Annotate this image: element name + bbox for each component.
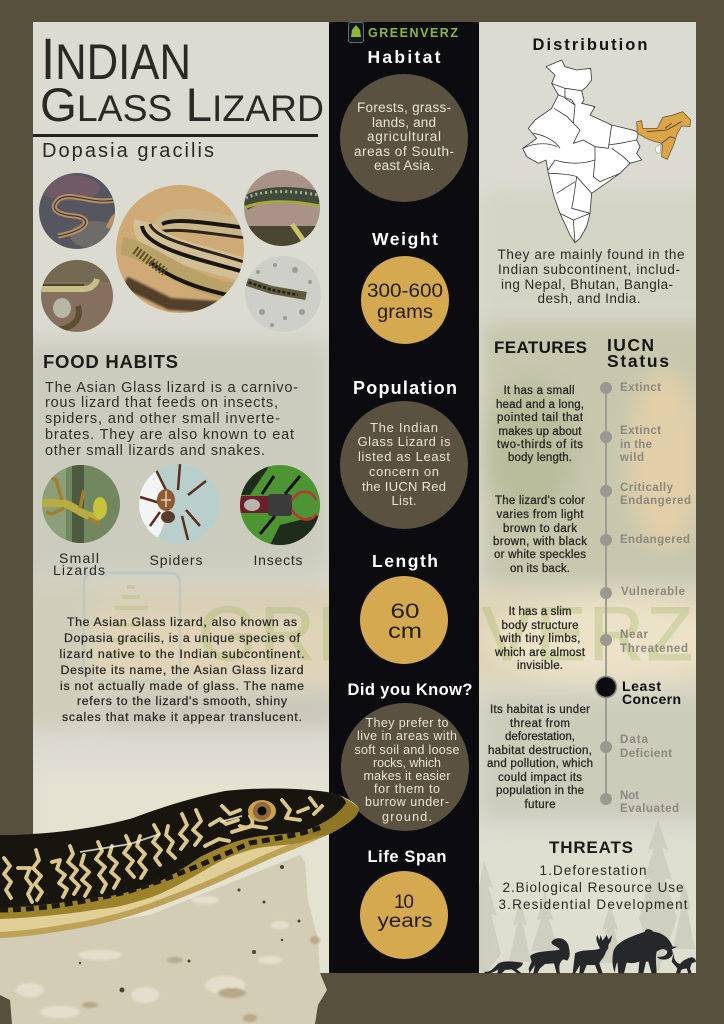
title: [40, 27, 324, 131]
lizard glossy highlight: [80, 816, 242, 852]
lizard skin pattern: [4, 798, 322, 902]
food labels: Insects: [254, 552, 302, 568]
lizard belly shadow: [0, 832, 327, 935]
photo: lizard on branch: [244, 170, 322, 248]
subtitle: scientific name: Dopasia gracilis: [42, 140, 214, 162]
stat: length: cm: [388, 620, 422, 643]
text block: threats list: [498, 863, 688, 912]
text block: feature head and tail: makes up about: [498, 426, 582, 438]
text block: species description: The Asian Glass lizard, also known as: [67, 615, 297, 629]
food labels: Spiders: [150, 552, 202, 568]
stat: habitat: lands, and: [372, 115, 436, 130]
text block: feature head and tail: It has a small: [504, 385, 574, 397]
text block: feature colour: [493, 495, 587, 575]
stat: weight: Weight: [372, 229, 438, 249]
heading: iucn status: IUCN: [607, 335, 654, 355]
text block: threats list: 3.Residential Development: [498, 897, 688, 912]
map: india with northeast highlighted: [523, 60, 691, 243]
text block: feature head and tail: pointed tail that: [497, 412, 584, 424]
food labels: Lizards: [53, 562, 105, 578]
callout: did you know: rocks, which: [373, 756, 441, 770]
text block: distribution: desh, and India.: [538, 291, 640, 306]
stat: life span: years: [378, 911, 432, 932]
text block: feature threat: future: [524, 799, 556, 811]
icon: leopard: [485, 961, 523, 973]
text block: feature threat: deforestation,: [505, 731, 575, 743]
text block: feature body: which are almost: [494, 647, 586, 659]
stat: population: The Indian: [370, 420, 438, 435]
text block: food habits: brates. They are also known to eat: [45, 427, 294, 443]
text block: species description: Despite its name, the Asian Glass lizard: [60, 663, 304, 677]
title: INDIAN: [41, 27, 191, 92]
icon: spider photo: [139, 464, 219, 544]
watermark: greenverz logo: GREENVERZ: [198, 592, 693, 677]
map: northeast region: [637, 112, 691, 159]
text block: species description: lizard native to the Indian subcontinent.: [60, 647, 304, 661]
text block: feature colour: brown, with black: [493, 536, 587, 548]
callout: did you know: soft soil and loose: [354, 743, 460, 757]
status labels: Vulnerable: [621, 586, 685, 598]
text block: distribution: Indian subcontinent, includ-: [498, 262, 680, 277]
status labels: Endangered: [620, 534, 690, 546]
text block: distribution: [498, 247, 684, 306]
text block: species description: [60, 615, 304, 724]
stat: population: [340, 378, 468, 529]
text block: feature head and tail: body length.: [508, 452, 572, 464]
stat: length: [360, 551, 448, 664]
lizard dark back: [0, 788, 346, 908]
stat: weight: [361, 229, 449, 344]
callout: did you know: Did you Know?: [348, 681, 472, 699]
icon: stag beetle photo: [240, 465, 320, 545]
status labels: Extinct: [620, 382, 661, 394]
map: india mainland: [523, 60, 642, 243]
stat: population: the IUCN Red: [362, 479, 446, 494]
heading: features: FEATURES: [494, 338, 587, 357]
forest trees background: [467, 820, 695, 976]
map: state borders: [523, 83, 637, 243]
text block: feature colour: brown to dark: [503, 523, 577, 535]
callout: did you know: makes it easier: [364, 769, 450, 783]
text block: food habits: other small lizards and snakes.: [45, 443, 265, 459]
lizard eye: [248, 800, 276, 822]
callout: did you know: for them to: [374, 782, 440, 796]
status labels: Near: [620, 629, 649, 641]
stat: habitat: east Asia.: [374, 158, 434, 173]
text block: food habits: The Asian Glass lizard is a carnivo-: [45, 380, 298, 396]
icon: ibex: [529, 938, 570, 973]
text block: feature threat: population in the: [496, 785, 584, 797]
stat: habitat: Forests, grass-: [357, 100, 451, 115]
icon: small lizard photo: [42, 465, 120, 543]
icon: elephant: [612, 929, 677, 973]
text block: food habits: rous lizard that feeds on insects,: [45, 395, 278, 411]
callout: did you know: live in areas with: [357, 729, 457, 743]
heading: iucn status: [607, 335, 669, 371]
text block: threats list: 1.Deforestation: [540, 863, 646, 878]
text block: feature colour: on its back.: [510, 563, 570, 575]
stat: life span: 10: [394, 892, 414, 913]
lizard snout: [305, 791, 359, 835]
logo: greenverz: GREENVERZ: [368, 26, 458, 40]
photo: lizard on dark rock: [39, 173, 120, 249]
photo: lizard close-up on sand: [116, 185, 246, 313]
status labels: [619, 382, 691, 815]
text block: feature colour: The lizard's color: [495, 495, 585, 507]
lizard body base: [0, 788, 359, 938]
text block: threats list: 2.Biological Resource Use: [502, 880, 684, 895]
text block: distribution: They are mainly found in the: [498, 247, 684, 262]
text block: species description: is not actually made of glass. The name: [60, 679, 304, 693]
stat: weight: 300-600: [367, 281, 443, 302]
icon: monkey: [672, 951, 696, 973]
photo: glass lizard head and body: [0, 788, 359, 938]
text block: feature body: [494, 606, 586, 672]
stat: population: List.: [392, 493, 416, 508]
text block: feature threat: Its habitat is under: [490, 704, 590, 716]
text block: feature threat: [487, 704, 593, 811]
status labels: Data: [620, 734, 649, 746]
watermark: greenverz logo: [84, 573, 693, 681]
stat: life span: Life Span: [368, 848, 446, 866]
text block: feature head and tail: [496, 385, 584, 464]
status labels: Deficient: [620, 748, 672, 760]
heading: food habits: FOOD HABITS: [43, 351, 178, 372]
status labels: wild: [619, 452, 644, 464]
active status label: Concern: [622, 691, 681, 707]
title: GLASS LIZARD: [40, 78, 324, 131]
text block: species description: scales that make it appear translucent.: [62, 710, 302, 724]
heading: threats: THREATS: [549, 838, 633, 857]
stat: population: Population: [353, 378, 457, 398]
text block: feature body: It has a slim: [508, 606, 572, 618]
stat: population: Glass Lizard is: [358, 434, 451, 449]
stat: population: concern on: [369, 464, 439, 479]
active status label: [622, 678, 681, 707]
status labels: in the: [620, 439, 652, 451]
callout: did you know: They prefer to: [366, 716, 449, 730]
stat: length: 60: [390, 600, 420, 623]
heading: iucn status: Status: [607, 351, 669, 371]
text block: species description: Dopasia gracilis, is a unique species of: [64, 631, 301, 645]
photo: lizard on gravel: [244, 256, 322, 334]
lizard olive flank: [0, 803, 359, 919]
text block: feature body: body structure: [502, 620, 578, 632]
callout: did you know: ground.: [382, 810, 432, 824]
stat: length: Length: [372, 551, 438, 571]
status labels: Evaluated: [620, 803, 679, 815]
least concern marker: [596, 676, 616, 698]
text block: feature threat: habitat destruction,: [488, 745, 592, 757]
text block: feature threat: threat from: [510, 718, 570, 730]
status labels: Not: [620, 790, 639, 802]
stat: population: listed as Least: [358, 449, 450, 464]
food labels: [53, 550, 302, 578]
text block: food habits: [45, 380, 298, 459]
icon: deer: [573, 935, 612, 973]
text block: feature threat: could impact its: [498, 772, 582, 784]
stat: life span: [360, 848, 448, 959]
active status label: Least: [622, 678, 661, 694]
text block: feature body: invisible.: [517, 660, 563, 672]
panel: center stats column background: [329, 22, 479, 973]
logo: greenverz: [348, 22, 458, 42]
sand ground: [0, 855, 327, 1024]
stat: habitat: areas of South-: [354, 144, 454, 159]
callout: did you know: burrow under-: [365, 795, 449, 809]
status labels: Threatened: [620, 643, 688, 655]
title divider rule: [33, 134, 318, 137]
status labels: Endangered: [620, 495, 691, 507]
text block: feature head and tail: head and a long,: [496, 399, 584, 411]
text block: feature head and tail: two-thirds of its: [497, 439, 583, 451]
text block: feature colour: or white speckles: [494, 549, 586, 561]
heading: distribution: Distribution: [532, 36, 648, 54]
text block: feature colour: varies from light: [496, 509, 584, 521]
icon: wildlife silhouettes: [485, 929, 696, 973]
callout: did you know: [341, 681, 472, 831]
text block: distribution: ing Nepal, Bhutan, Bangla-: [501, 277, 673, 292]
food labels: Small: [59, 550, 99, 566]
stat: weight: grams: [377, 302, 433, 323]
lizard lower scale band: [0, 826, 325, 910]
stat: habitat: [340, 47, 468, 202]
text block: species description: refers to the lizard's smooth, shiny: [77, 694, 288, 708]
chart: iucn status timeline: [596, 382, 691, 815]
photo: lizard among rocks: [41, 260, 113, 332]
stat: habitat: agricultural: [367, 129, 441, 144]
stat: habitat: Habitat: [368, 47, 441, 67]
status labels: Extinct: [620, 425, 661, 437]
text block: feature threat: and pollution, which: [487, 758, 593, 770]
text block: feature body: with tiny limbs,: [498, 633, 580, 645]
text block: food habits: spiders, and other small inverte-: [45, 411, 280, 427]
status labels: Critically: [620, 482, 674, 494]
